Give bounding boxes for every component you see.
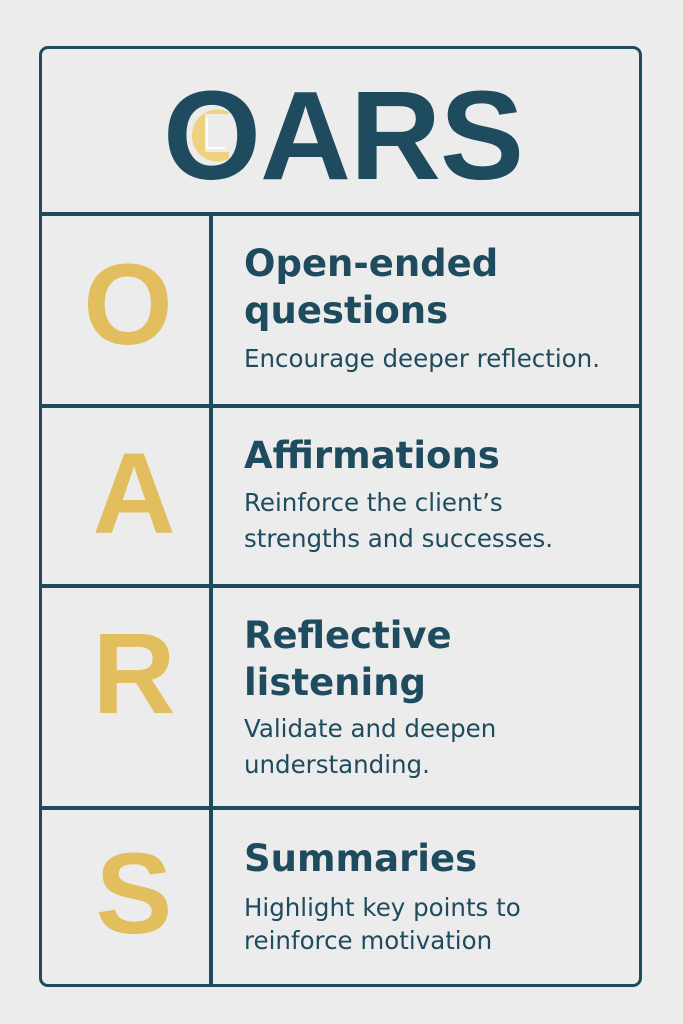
- row 2 text: Affirmations: [244, 434, 500, 477]
- letter O: O: [83, 241, 173, 369]
- row 4 text: reinforce motivation: [244, 926, 492, 955]
- icon: logo inside O: [192, 110, 229, 162]
- row 1 text: Encourage deeper reflection.: [244, 344, 600, 373]
- letter A: A: [92, 430, 176, 558]
- row 4 text: [244, 837, 521, 955]
- row 2 text: [244, 434, 553, 553]
- row 3 text: Reflective: [244, 614, 452, 657]
- row 4 text: Highlight key points to: [244, 893, 521, 922]
- row 3 text: Validate and deepen: [244, 714, 496, 743]
- row 3 text: understanding.: [244, 750, 430, 779]
- row 3 text: listening: [244, 661, 426, 704]
- row 2 text: Reinforce the client’s: [244, 488, 503, 517]
- row 1 text: [244, 242, 600, 373]
- title: OARS: [163, 65, 523, 206]
- row 2 text: strengths and successes.: [244, 524, 553, 553]
- row 1 text: questions: [244, 289, 448, 332]
- letter R: R: [92, 610, 176, 738]
- row 3 text: [244, 614, 496, 779]
- row 1 text: Open-ended: [244, 242, 498, 285]
- row 4 text: Summaries: [244, 837, 477, 880]
- letter S: S: [96, 830, 172, 958]
